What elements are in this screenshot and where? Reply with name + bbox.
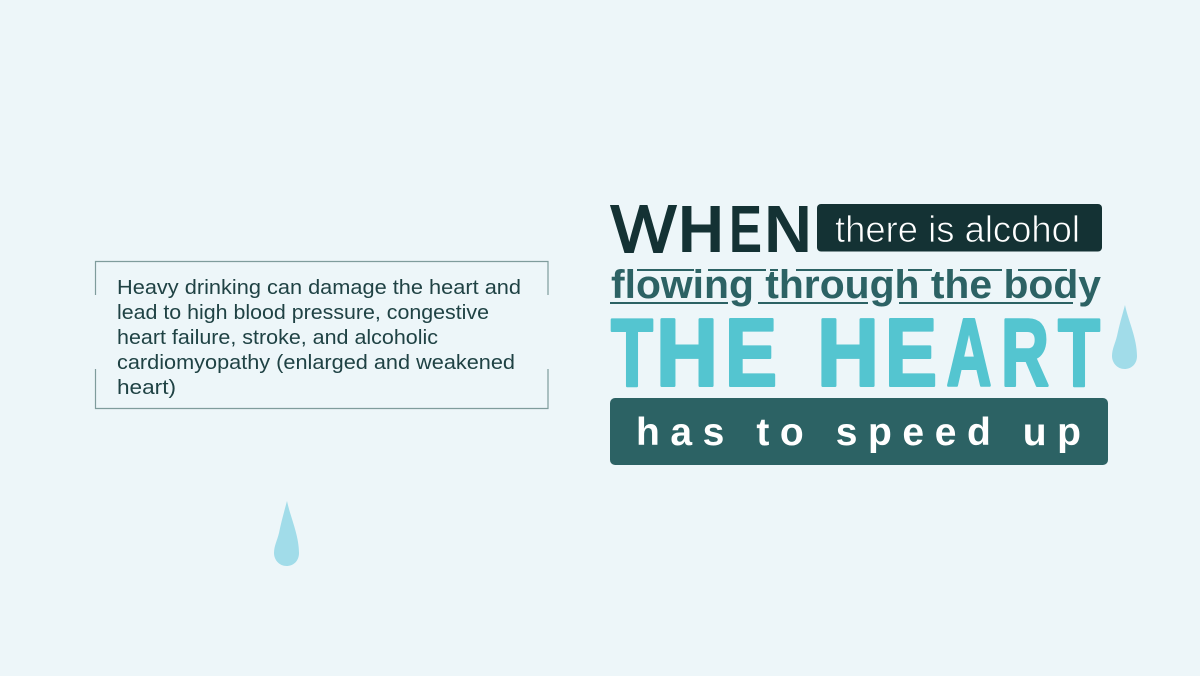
- text block: heart damage: heart): [117, 376, 176, 399]
- banner: has to speed up: [610, 398, 1108, 465]
- heading: THE HEART: T: [611, 300, 653, 406]
- heading: THE HEART: H: [656, 300, 718, 406]
- label: there is alcohol: there is alcohol: [835, 209, 1080, 250]
- text block: heart damage: Heavy drinking can damage the heart and: [117, 276, 521, 299]
- text block: heart damage: [117, 276, 521, 399]
- heading word: WHEN: N: [764, 192, 812, 267]
- icon: right water drop: [1112, 305, 1137, 369]
- icon: lower water drop: [274, 501, 299, 566]
- heading: THE HEART: H: [817, 300, 879, 406]
- heading word: WHEN: W: [611, 192, 677, 267]
- heading word: WHEN: E: [729, 192, 762, 267]
- heading: THE HEART: T: [1058, 300, 1100, 406]
- text block: heart damage: cardiomyopathy (enlarged and weakened: [117, 351, 515, 374]
- headline: when alcohol flows the heart speeds up: [610, 192, 1108, 465]
- heading: THE HEART: A: [946, 300, 992, 406]
- heading: THE HEART: E: [725, 300, 777, 406]
- heading line: flowing through the body: flowing through the body: [611, 263, 1102, 307]
- text block: heart damage: lead to high blood pressure, congestive: [117, 301, 489, 324]
- heading: THE HEART: E: [885, 300, 937, 406]
- banner: has to speed up: has to speed up: [636, 411, 1081, 454]
- text block: heart damage: heart failure, stroke, and alcoholic: [117, 326, 438, 349]
- heading word: WHEN: H: [678, 192, 724, 267]
- panel: heavy drinking text box: [96, 262, 548, 408]
- heading: THE HEART: R: [1001, 300, 1049, 406]
- box frame: [96, 262, 548, 408]
